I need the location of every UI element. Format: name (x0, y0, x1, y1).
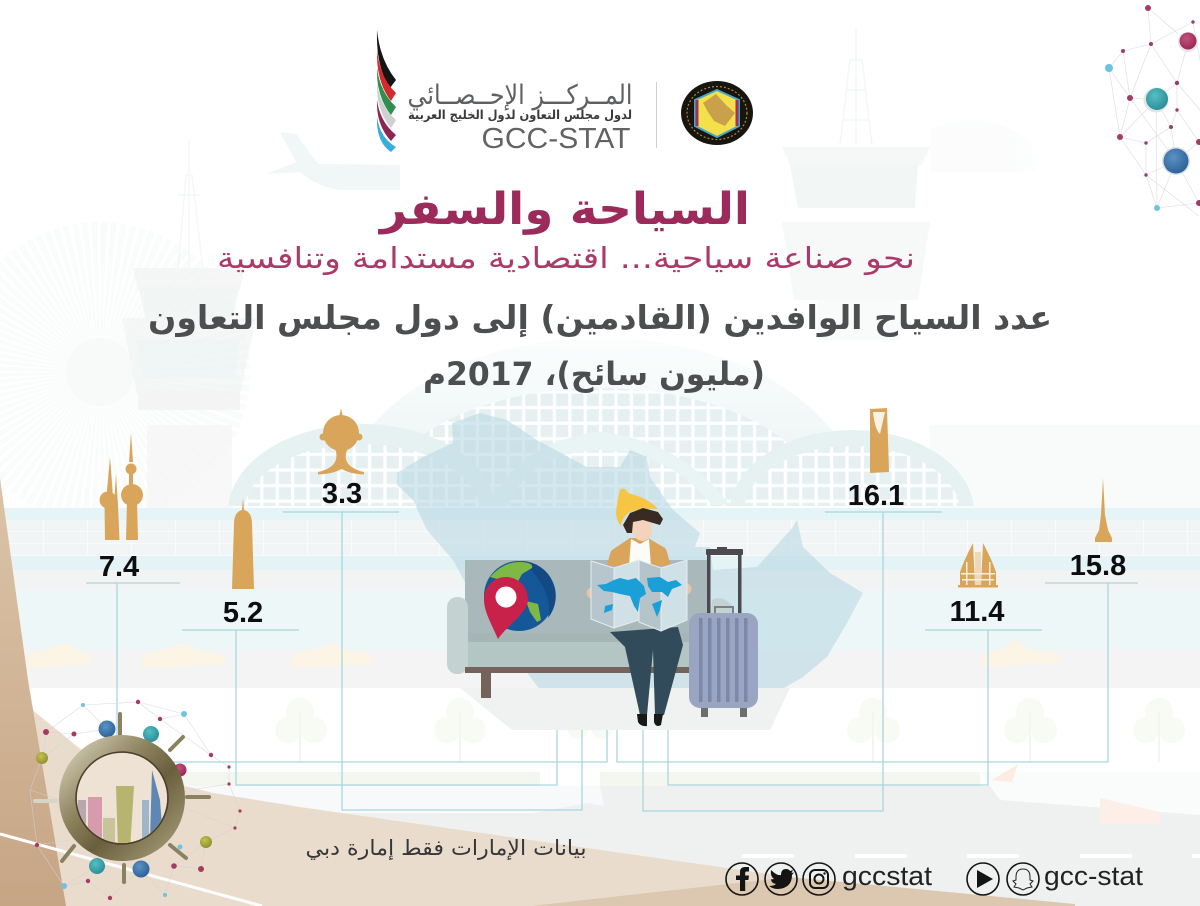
wheel handles (35, 714, 209, 882)
wheel centre with skyline (77, 753, 167, 843)
social: gcc-stat handles (967, 861, 1144, 895)
icon: Qatar towers (958, 543, 998, 588)
icon: Oman incense burner (318, 408, 364, 474)
title: السياحة والسفر (378, 184, 750, 235)
panel: bottom-left tan shapes (0, 478, 1075, 906)
traveller: face (632, 520, 652, 541)
background: apron and road (0, 764, 1200, 906)
map: Arabian Peninsula (397, 413, 863, 692)
light beige wedge (0, 708, 790, 906)
connector: Kuwait (86, 583, 607, 762)
value: 16.1: 16.1 (848, 480, 904, 512)
wheel network links (30, 702, 240, 898)
icon: instagram (803, 863, 835, 895)
emblem: ship wheel with network (30, 700, 242, 900)
icon: suitcase (689, 547, 758, 717)
icon: youtube play (967, 863, 999, 895)
icon: snapchat (1007, 863, 1039, 895)
icon: globe with location pin (484, 561, 556, 639)
logo: GCC emblem (681, 81, 753, 145)
value: 7.4: 7.4 (99, 551, 139, 583)
icon: Kuwait Towers (100, 433, 143, 540)
background: stacked facade bands (0, 508, 1200, 688)
connector: Qatar (668, 630, 1042, 785)
icon: Bahrain tower (232, 498, 254, 589)
background: terminal arches (228, 378, 974, 506)
background: taxis (26, 640, 1062, 668)
wheel small nodes (35, 700, 242, 900)
connector: Oman (283, 512, 582, 810)
value: 5.2: 5.2 (223, 597, 263, 629)
chart heading line 2: (مليون سائح)، 2017م (423, 355, 765, 393)
handle text: gcc-stat (1044, 861, 1144, 891)
wheel inner edge (76, 752, 168, 844)
social: gccstat handles (726, 861, 933, 895)
background: trees (275, 698, 1185, 762)
icon: Kingdom Centre (870, 408, 889, 473)
network balls (1144, 32, 1198, 175)
wheel rim (68, 744, 176, 852)
network links (1109, 8, 1200, 216)
traveller: hands (586, 584, 692, 598)
icon: Burj Khalifa (1095, 478, 1112, 542)
network nodes (1105, 5, 1200, 211)
illustration: folded world map (591, 560, 687, 631)
traveller: hat (616, 489, 658, 526)
value: 3.3: 3.3 (322, 478, 362, 510)
value: 11.4: 11.4 (950, 596, 1004, 628)
background: sunburst (0, 222, 250, 522)
logo divider (656, 82, 657, 148)
logo: GCC-STAT wordmark: GCC-STAT (482, 123, 631, 155)
darker beige strip (530, 877, 1075, 906)
connector: UAE (617, 583, 1138, 762)
traveller: jacket (607, 538, 670, 566)
footnote: بيانات الإمارات فقط إمارة دبي (306, 836, 586, 861)
white diagonal stripe (0, 834, 262, 906)
logo: GCC-STAT ribbons (377, 30, 396, 152)
tan triangle (0, 478, 66, 906)
chart heading line 1: عدد السياح الوافدين (القادمين) إلى دول مجلس التعاون (148, 298, 1052, 338)
illustration: sofa (447, 560, 732, 698)
network: top-right (1105, 5, 1200, 216)
connector lines (86, 512, 1138, 811)
icon: twitter (765, 863, 797, 895)
traveller: trousers (610, 627, 683, 715)
platform under the sofa (460, 688, 790, 730)
logo: Arabic name: المــركـــز الإحــصــائي (408, 80, 632, 111)
value: 15.8: 15.8 (1070, 550, 1126, 582)
background: right building haze (930, 425, 1200, 510)
connector: Saudi Arabia (643, 512, 942, 811)
background: right control tower (782, 28, 1035, 340)
subtitle: نحو صناعة سياحية... اقتصادية مستدامة وتنافسية (217, 241, 915, 275)
handle text: gccstat (842, 861, 933, 891)
icon: facebook (726, 863, 758, 895)
illustration: traveller reading a map (586, 489, 692, 726)
traveller: shirt (629, 539, 651, 566)
logo: Arabic sub-name: لدول مجلس التعاون لدول الخليج العربية (408, 107, 632, 122)
traveller: hair (623, 508, 663, 533)
background: airplane (266, 132, 400, 190)
wheel balls (36, 720, 212, 878)
background: left control tower (122, 140, 256, 510)
traveller: shoes (637, 714, 663, 726)
connector: Bahrain (182, 630, 557, 785)
